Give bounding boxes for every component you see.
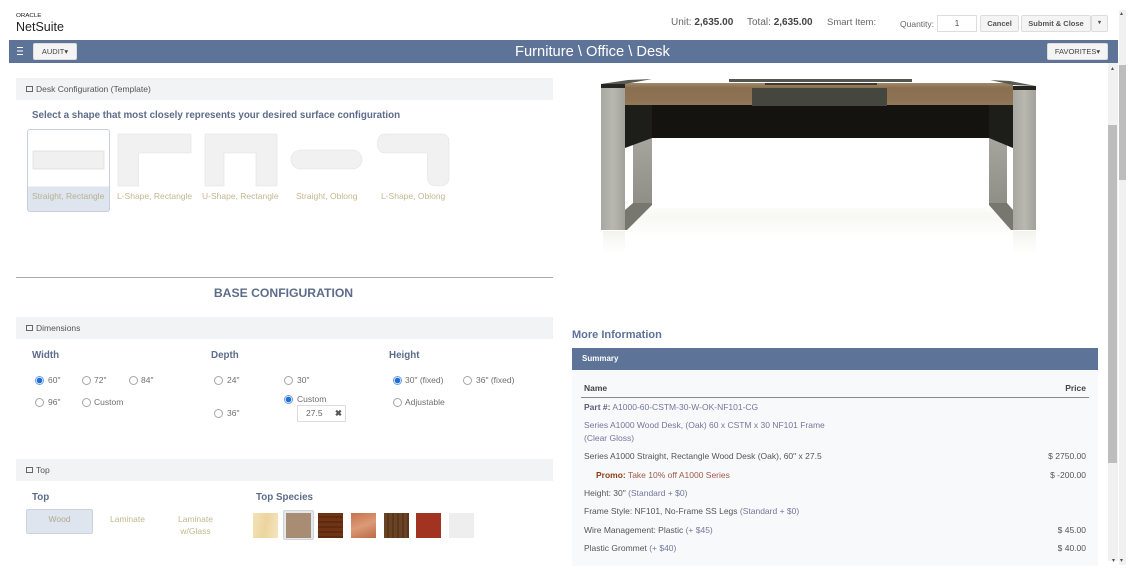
- shape icons: [32, 134, 450, 186]
- panel: summary: [572, 348, 1098, 566]
- option: laminate with glass: Laminate: [178, 514, 213, 524]
- panel: top: [16, 459, 553, 536]
- row: plastic grommet: Plastic Grommet (+ $40): [584, 543, 676, 553]
- heading: top: Top: [32, 492, 49, 503]
- navigation bar: [9, 40, 1118, 63]
- table column headings: [581, 382, 1089, 398]
- row: promo: $ -200.00: [1050, 470, 1086, 480]
- scrollbars: ▴: [1111, 66, 1114, 72]
- option: laminate: Laminate: [110, 514, 145, 524]
- top species swatches: [253, 510, 474, 540]
- swatch: oak: [286, 513, 311, 538]
- depth options: Custom: [297, 394, 326, 404]
- section header: desk configuration: [16, 78, 553, 100]
- header totals and actions: Smart Item:: [827, 17, 876, 28]
- selected swatch frame: [283, 510, 314, 540]
- scrollbars: ▾: [1112, 558, 1115, 564]
- panel: desk configuration: Straight, Oblong: [296, 191, 357, 201]
- row: base desk: [584, 451, 1086, 461]
- shape labels: Straight, Rectangle: [32, 191, 104, 201]
- width options: Custom: [94, 397, 123, 407]
- depth options: Depth: [211, 350, 239, 361]
- favorites button: [1047, 43, 1108, 60]
- row: promo: Promo: Take 10% off A1000 Series: [596, 470, 730, 480]
- option: wood: Wood: [48, 514, 71, 524]
- product image: desk: [601, 79, 1036, 242]
- section header: top: Top: [36, 465, 50, 475]
- option: wood: [26, 509, 93, 534]
- favorites button: FAVORITES▾: [1055, 47, 1100, 56]
- depth options: [211, 350, 346, 422]
- row: wire management: $ 45.00: [1058, 525, 1086, 535]
- header totals and actions: Quantity:: [900, 19, 934, 29]
- row: plastic grommet: $ 40.00: [1058, 543, 1086, 553]
- audit button: AUDIT▾: [42, 47, 68, 56]
- panel: dimensions: [16, 317, 553, 422]
- selected tile highlight: [27, 129, 110, 212]
- width options: Width: [32, 350, 59, 361]
- custom depth input: [297, 405, 346, 422]
- header totals and actions: Total: 2,635.00: [747, 17, 813, 28]
- row: description: (Clear Gloss): [584, 433, 634, 443]
- page title: Furniture \ Office \ Desk: [515, 44, 670, 60]
- summary rows: [584, 402, 1086, 553]
- table column headings: Name: [584, 383, 607, 393]
- panel: desk configuration: U-Shape, Rectangle: [202, 191, 279, 201]
- header totals and actions: Cancel: [987, 19, 1012, 28]
- section header: dimensions: [16, 317, 553, 339]
- header totals and actions: ▾: [1098, 20, 1101, 26]
- icon: hamburger menu: [17, 47, 23, 55]
- swatch: white: [449, 513, 474, 538]
- section header: top: [16, 459, 553, 481]
- custom depth input: 27.5: [306, 408, 323, 418]
- height options: Height: [389, 350, 419, 361]
- table column headings: Price: [1065, 383, 1086, 393]
- height options: 30" (fixed): [405, 375, 443, 385]
- option: laminate with glass: [178, 514, 213, 536]
- header totals and actions: Unit: 2,635.00: [671, 17, 733, 28]
- scrollbars: [1108, 10, 1126, 565]
- swatch: maple: [253, 513, 278, 538]
- header totals and actions: 1: [955, 18, 959, 28]
- height options: [389, 350, 514, 407]
- summary header bar: [572, 348, 1098, 370]
- row: frame style: Frame Style: NF101, No-Frame SS Legs (Standard + $0): [584, 506, 799, 516]
- swatch: cherry: [351, 513, 376, 538]
- heading: more information: More Information: [572, 329, 662, 341]
- width options: 72": [94, 375, 106, 385]
- width options: 60": [48, 375, 60, 385]
- row: description: [584, 420, 825, 443]
- summary header bar: Summary: [582, 354, 618, 363]
- swatch: walnut: [318, 513, 343, 538]
- depth options: 24": [227, 375, 239, 385]
- height options: Adjustable: [405, 397, 445, 407]
- header totals and actions: Submit & Close: [1028, 19, 1084, 28]
- row: wire management: Wire Management: Plastic (+ $45): [584, 525, 713, 535]
- panel: desk configuration: [16, 78, 553, 212]
- row: part number: Part #: A1000-60-CSTM-30-W-OK-NF101-CG: [584, 402, 758, 412]
- audit button: [33, 43, 77, 60]
- heading: base configuration: BASE CONFIGURATION: [214, 286, 353, 300]
- depth options: 36": [227, 408, 239, 418]
- row: base desk: $ 2750.00: [1048, 451, 1086, 461]
- panel: desk configuration: L-Shape, Oblong: [381, 191, 445, 201]
- depth options: 30": [297, 375, 309, 385]
- section header: dimensions: Dimensions: [36, 323, 80, 333]
- width options: 84": [141, 375, 153, 385]
- logo: Oracle NetSuite: NetSuite: [16, 20, 64, 34]
- row: height: Height: 30" (Standard + $0): [584, 488, 687, 498]
- row: wire management: [584, 525, 1086, 535]
- row: promo: [596, 470, 1086, 480]
- logo: Oracle NetSuite: ORACLE: [16, 13, 41, 19]
- row: plastic grommet: [584, 543, 1086, 553]
- width options: 96": [48, 397, 60, 407]
- text: ▴: [1120, 11, 1123, 17]
- swatch: mahogany: [416, 513, 441, 538]
- heading: select a shape: Select a shape that most closely represents your desired surface configuration: [32, 110, 400, 121]
- header totals and actions: [671, 15, 1108, 32]
- panel: desk configuration: L-Shape, Rectangle: [117, 191, 192, 201]
- heading: base configuration: [16, 277, 553, 302]
- section header: desk configuration: Desk Configuration (Template): [36, 84, 151, 94]
- width options: [32, 350, 154, 407]
- heading: top species: Top Species: [256, 492, 313, 503]
- custom depth input: ✖: [335, 408, 342, 418]
- scrollbars: ▾: [1120, 558, 1123, 564]
- swatch: dark oak: [384, 513, 409, 538]
- logo: Oracle NetSuite: [16, 13, 64, 34]
- row: base desk: Series A1000 Straight, Rectangle Wood Desk (Oak), 60" x 27.5: [584, 451, 822, 461]
- height options: 36" (fixed): [476, 375, 514, 385]
- option: laminate with glass: w/Glass: [180, 526, 211, 536]
- row: description: Series A1000 Wood Desk, (Oak) 60 x CSTM x 30 NF101 Frame: [584, 420, 825, 430]
